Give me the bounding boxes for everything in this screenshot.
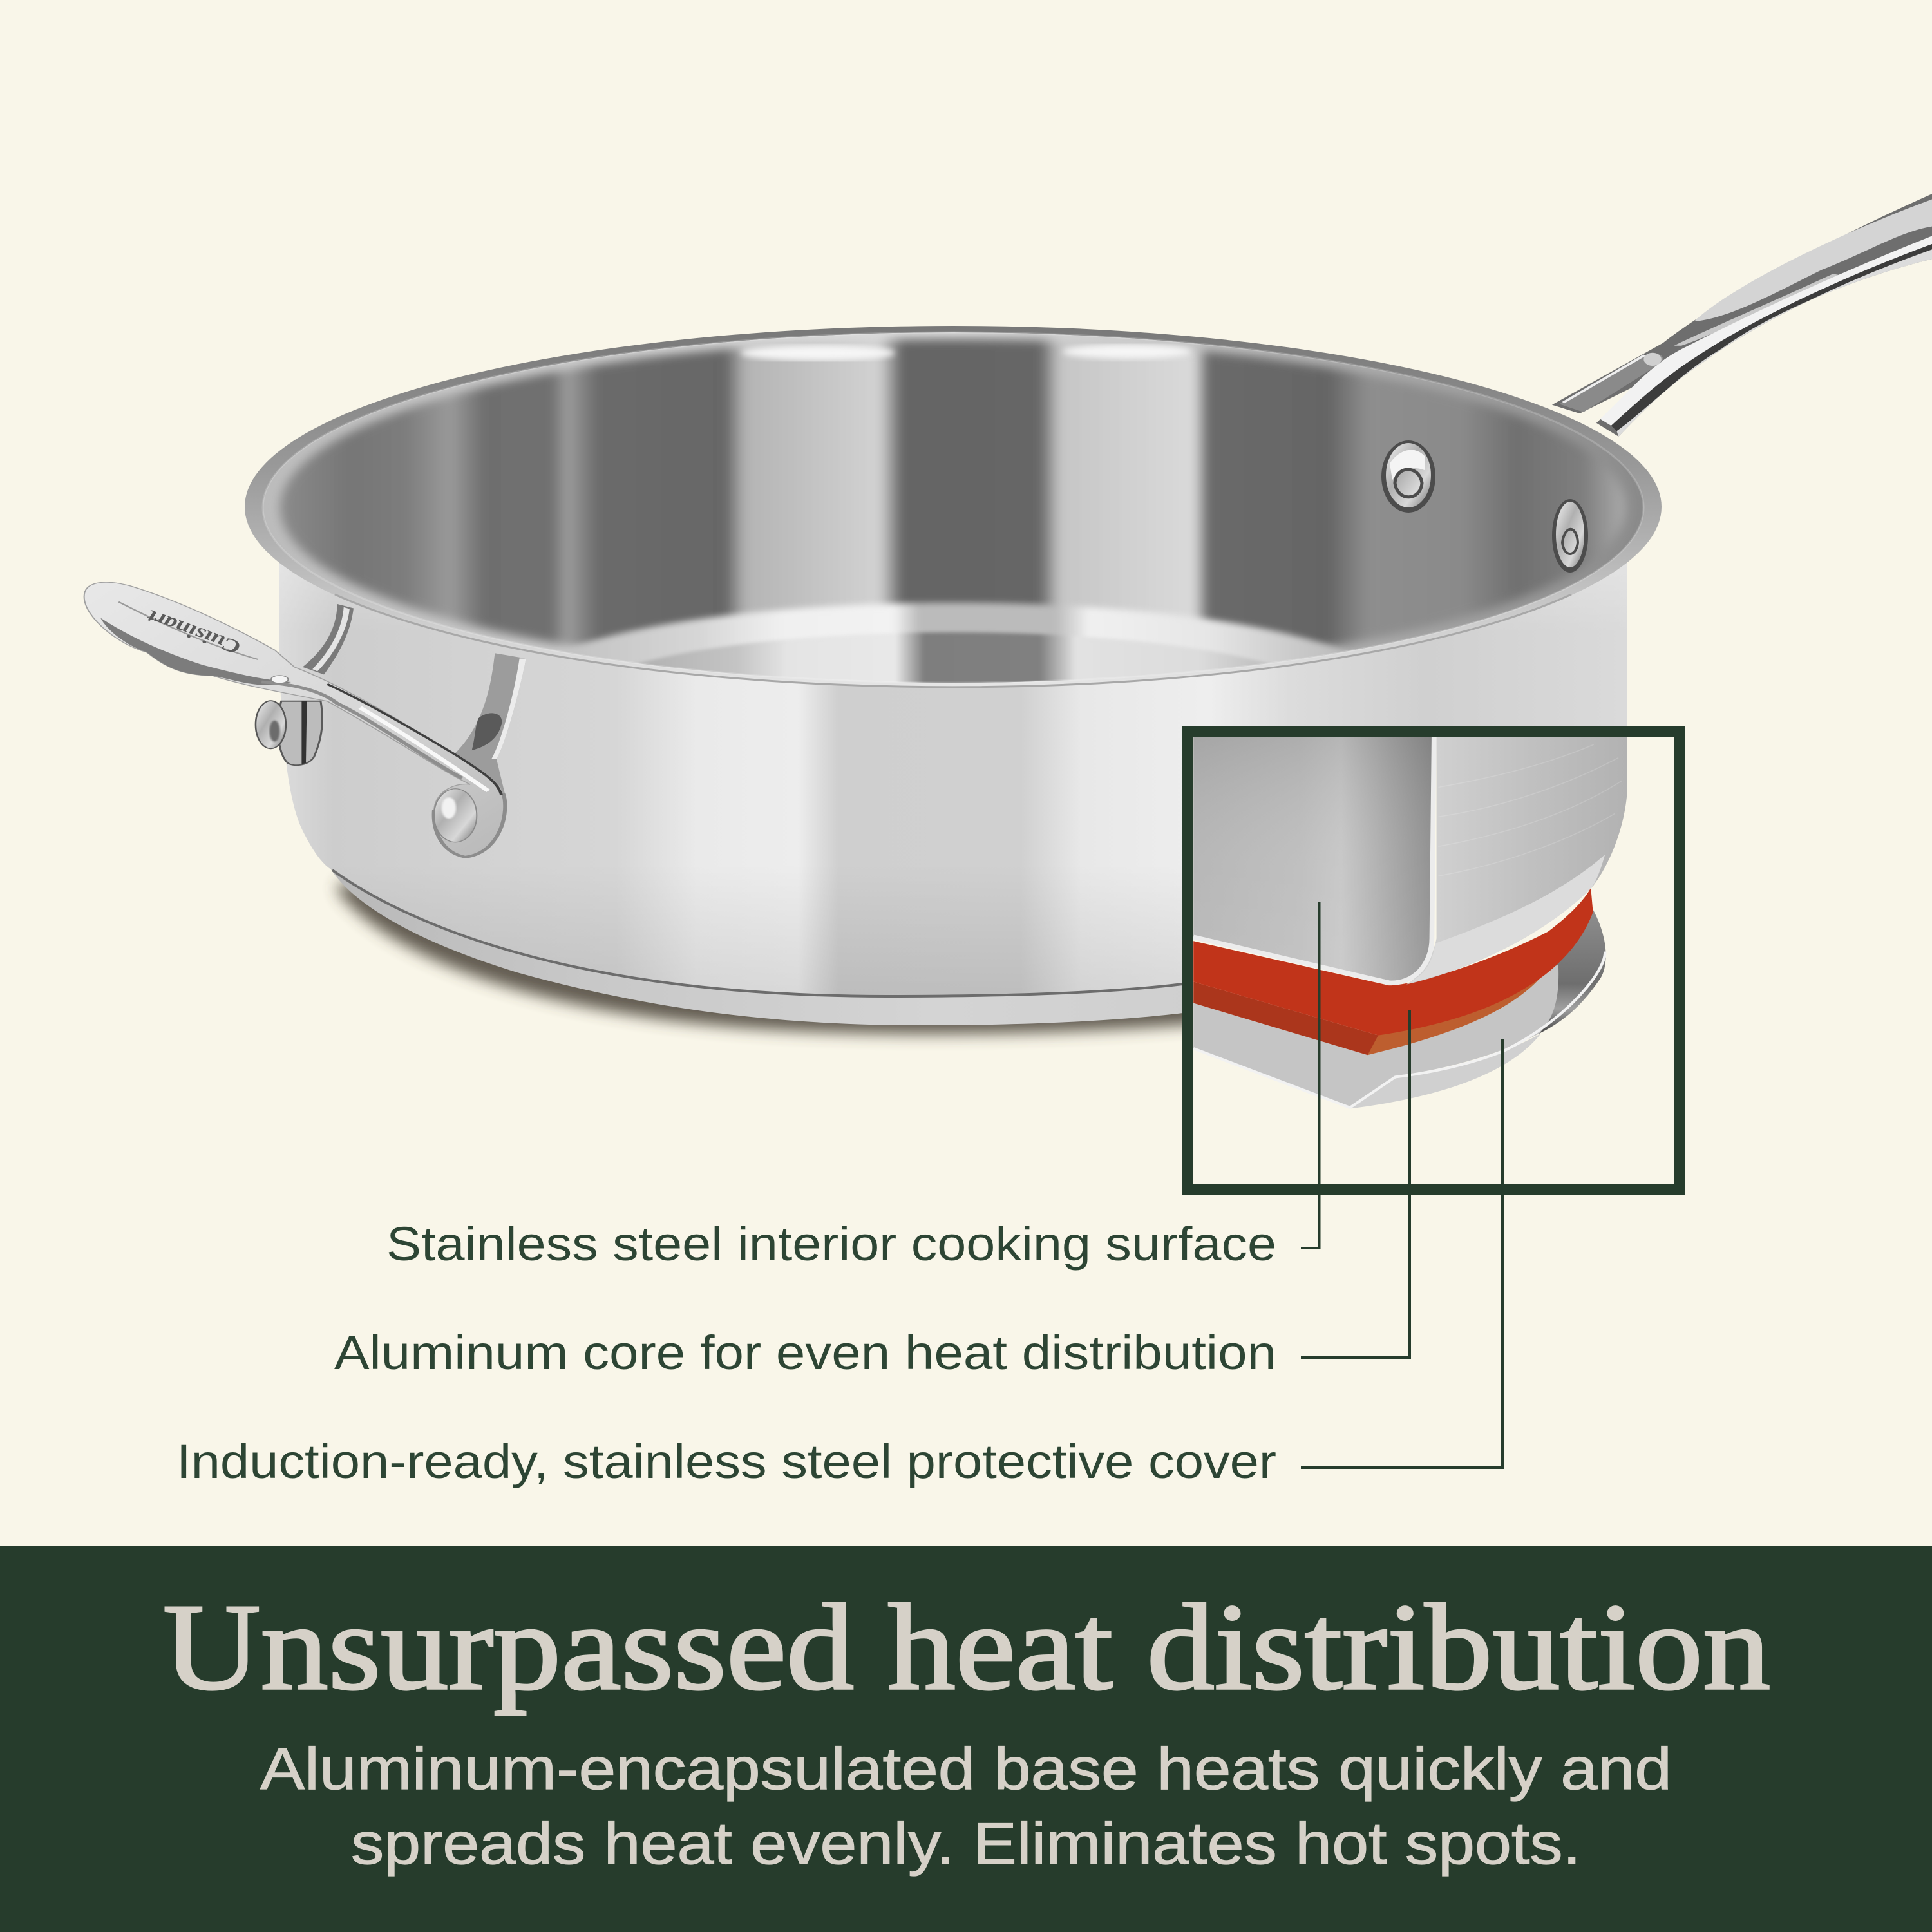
orange aluminum underside bbox=[1368, 971, 1546, 1055]
leader line: interior surface bbox=[1301, 902, 1319, 1248]
banner heading: Unsurpassed heat distribution bbox=[163, 1578, 1770, 1716]
front bolt bbox=[434, 789, 477, 842]
pan floor bbox=[638, 630, 1267, 683]
pan rim lower edge line bbox=[335, 594, 1571, 687]
banner body line 2: spreads heat evenly. Eliminates hot spots. bbox=[351, 1811, 1581, 1877]
leader line: protective cover bbox=[1301, 1039, 1502, 1468]
lower lip of base cover bbox=[1350, 1034, 1540, 1108]
handle rod lower shading bbox=[261, 682, 462, 778]
interior wall reflections bbox=[276, 332, 1628, 650]
left loop handle bbox=[84, 582, 526, 857]
bottom banner bbox=[0, 1546, 1932, 1932]
pan base ring bbox=[327, 863, 1198, 1025]
dark inner base curve bbox=[1539, 909, 1606, 1034]
stainless protective cover face bbox=[1193, 965, 1558, 1108]
handle brand text: Cuisinart bbox=[144, 605, 243, 658]
saute pan photo illustration bbox=[84, 194, 1932, 1034]
rim inner line bbox=[263, 332, 1643, 683]
handle leaf shadow bbox=[100, 618, 291, 685]
label: aluminum core: Aluminum core for even heat distribution bbox=[334, 1326, 1276, 1379]
red aluminum core bbox=[1193, 888, 1593, 1036]
pan drop shadow bbox=[338, 882, 1198, 1034]
long handle bbox=[1552, 194, 1932, 437]
top rim glints bbox=[741, 345, 1191, 361]
pan interior bbox=[263, 332, 1643, 683]
banner body line 1: Aluminum-encapsulated base heats quickly and bbox=[260, 1736, 1672, 1802]
cross-section cutaway inside frame bbox=[1193, 737, 1627, 1109]
ring plate edge bbox=[434, 793, 505, 857]
back strap bbox=[303, 604, 354, 674]
cover highlight edge bbox=[1193, 952, 1605, 1108]
floor corner band bbox=[572, 599, 1344, 663]
pan rim bbox=[245, 326, 1662, 688]
dark red aluminum face bbox=[1193, 981, 1378, 1055]
embossed brand mark bbox=[118, 602, 258, 659]
front strap bbox=[454, 653, 526, 793]
right interior rivet upper bbox=[1381, 440, 1435, 513]
outer wall bbox=[1406, 737, 1627, 985]
label: interior surface: Stainless steel interior cooking surface bbox=[386, 1217, 1276, 1271]
inner wall bbox=[1193, 737, 1432, 981]
right interior rivet lower bbox=[1552, 499, 1588, 573]
inner wall highlight edge bbox=[1193, 737, 1434, 983]
outer wall brushed lines bbox=[1438, 744, 1622, 876]
handle dark contour bbox=[327, 684, 502, 795]
label: protective cover: Induction-ready, stainless steel protective cover bbox=[176, 1435, 1276, 1488]
base seam line bbox=[332, 870, 1198, 996]
pan outer body bbox=[279, 554, 1627, 996]
leader line: aluminum core bbox=[1301, 1010, 1410, 1358]
zoom callout frame bbox=[1188, 732, 1680, 1189]
back mounting plate and bolt bbox=[278, 701, 322, 765]
handle shape bbox=[84, 582, 505, 857]
outer wall lower lip bbox=[1406, 855, 1605, 984]
